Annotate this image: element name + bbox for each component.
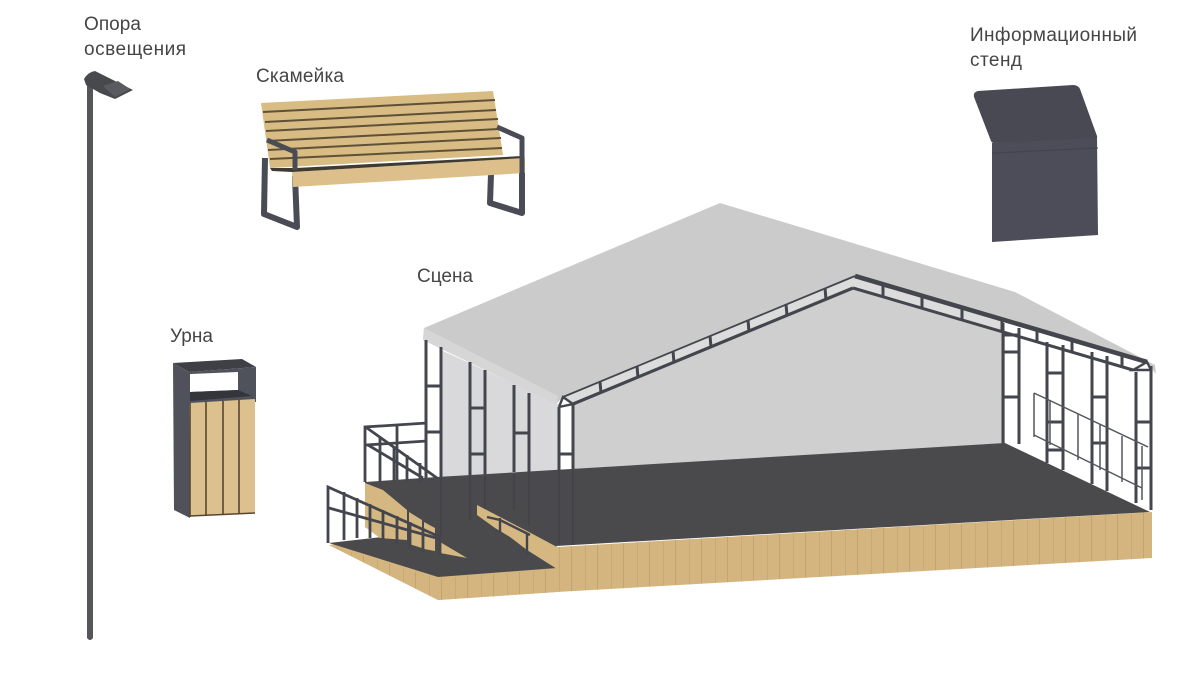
label: information stand: Информационный — [970, 25, 1137, 46]
stage roof truss — [559, 276, 1151, 407]
stage wood side base — [329, 482, 557, 600]
stage back wall — [572, 284, 1005, 472]
bench seat — [292, 158, 525, 187]
ramp wood side panels — [365, 483, 557, 569]
stage front wood cladding — [557, 512, 1152, 592]
label: information stand — [970, 25, 1137, 71]
label: stage: Сцена — [417, 266, 473, 287]
stage side wall — [441, 350, 560, 480]
bench armrests — [267, 127, 522, 175]
icon: bench — [261, 91, 525, 227]
stage — [328, 203, 1156, 600]
right railing — [1034, 393, 1148, 500]
label: lighting pole: освещения — [84, 39, 186, 60]
label: bench: Скамейка — [256, 66, 344, 87]
stage deck and ramps — [329, 443, 1150, 577]
bin wood slats — [190, 399, 255, 516]
icon: information stand — [974, 85, 1098, 242]
bin opening — [190, 372, 238, 392]
left upper railing — [365, 423, 437, 482]
bench legs — [264, 158, 522, 227]
right ramp rail — [487, 517, 530, 555]
bench backrest — [261, 91, 503, 168]
truss infill — [563, 276, 1147, 404]
left lower railing — [328, 487, 440, 555]
stage left columns — [426, 340, 573, 480]
label: lighting pole: Опора — [84, 14, 141, 35]
icon: trash bin — [173, 359, 256, 518]
lower platform wood cladding — [329, 545, 557, 600]
stage right columns — [1003, 323, 1151, 510]
ghost columns through the deck — [441, 470, 573, 545]
label: information stand: стенд — [970, 50, 1022, 71]
label: trash bin: Урна — [170, 326, 213, 347]
stage roof — [423, 203, 1156, 404]
label: lighting pole — [84, 14, 186, 60]
icon: lighting pole — [84, 71, 133, 640]
